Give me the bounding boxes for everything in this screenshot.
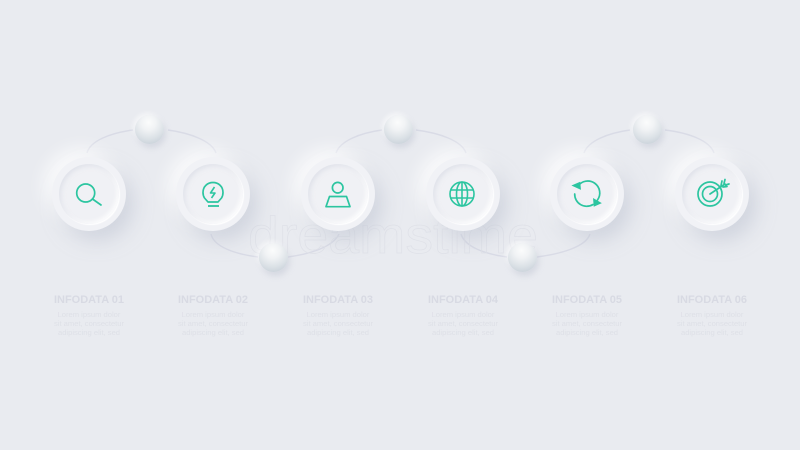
text block 6: INFODATA 06 (677, 294, 747, 306)
text block 2: Lorem ipsum dolor (182, 310, 244, 318)
text block 4: Lorem ipsum dolor (432, 310, 494, 318)
watermark: dreamstime (248, 207, 538, 265)
text block 2: adipiscing elit, sed (182, 328, 244, 336)
sphere 3 (384, 115, 413, 144)
icon: globe (449, 181, 475, 207)
text block 1: sit amet, consectetur (54, 318, 124, 328)
text block 4: sit amet, consectetur (428, 318, 498, 328)
text block 4 (428, 294, 498, 336)
text block 3: INFODATA 03 (303, 294, 373, 306)
text block 6: sit amet, consectetur (677, 318, 747, 328)
node 5: refresh (550, 157, 624, 231)
node 4: globe (426, 157, 500, 231)
text block 6: Lorem ipsum dolor (681, 310, 743, 318)
text block 3: adipiscing elit, sed (307, 328, 369, 336)
text block 6: adipiscing elit, sed (681, 328, 743, 336)
text block 5: INFODATA 05 (552, 294, 622, 306)
icon: circular arrows (572, 180, 602, 208)
text block 3: Lorem ipsum dolor (307, 310, 369, 318)
text block 5 (552, 294, 622, 336)
text block 2: INFODATA 02 (178, 294, 248, 306)
text block 1 (54, 294, 124, 336)
sphere 2 (259, 243, 288, 272)
node 6: target (675, 157, 749, 231)
text block 2: sit amet, consectetur (178, 318, 248, 328)
icon: bolt bulb (202, 182, 224, 207)
node 1: search (52, 157, 126, 231)
sphere 1 (135, 115, 164, 144)
node 3: person (301, 157, 375, 231)
icon: magnifier (76, 183, 102, 206)
sphere 4 (508, 243, 537, 272)
node 2: energy bulb (176, 157, 250, 231)
text block 3: sit amet, consectetur (303, 318, 373, 328)
text block 3 (303, 294, 373, 336)
text block 4: INFODATA 04 (428, 294, 498, 306)
text block 1: INFODATA 01 (54, 294, 124, 306)
text block 4: adipiscing elit, sed (432, 328, 494, 336)
text block 1: adipiscing elit, sed (58, 328, 120, 336)
sphere 5 (633, 115, 662, 144)
text block 5: adipiscing elit, sed (556, 328, 618, 336)
text block 2 (178, 294, 248, 336)
icon: target with arrow (697, 178, 730, 207)
text block 5: Lorem ipsum dolor (556, 310, 618, 318)
icon: person on map (325, 182, 351, 208)
text block 6 (677, 294, 747, 336)
text block 1: Lorem ipsum dolor (58, 310, 120, 318)
text block 5: sit amet, consectetur (552, 318, 622, 328)
